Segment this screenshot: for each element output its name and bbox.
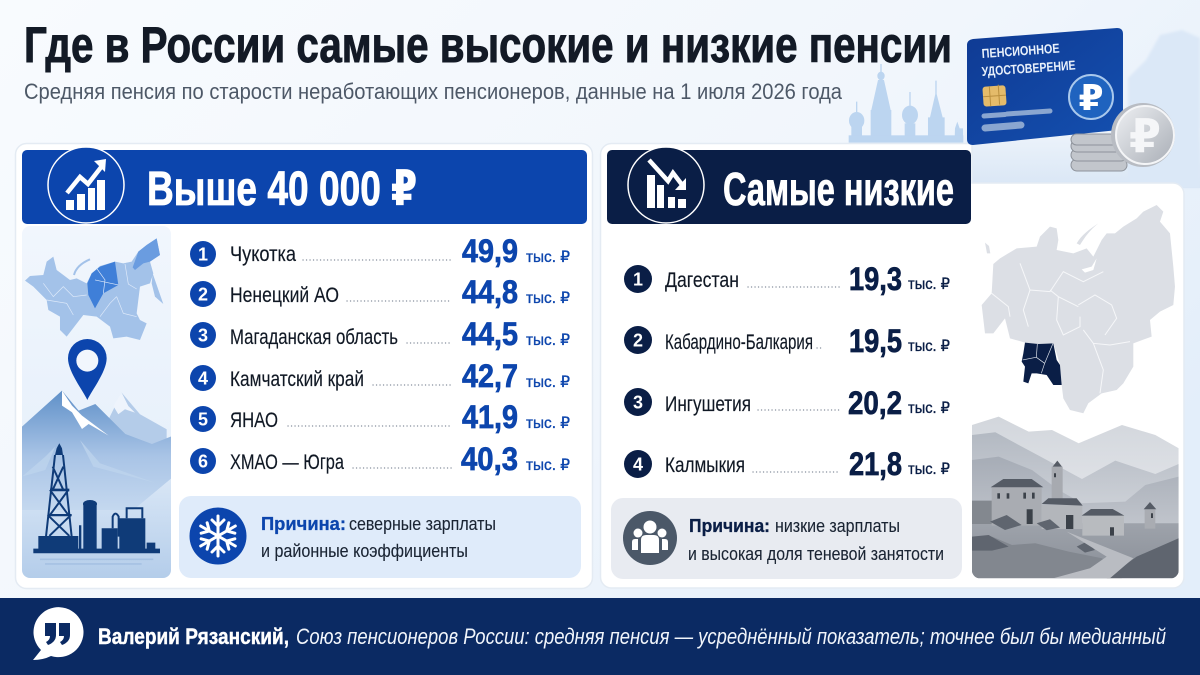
row: Magadan: 3 xyxy=(198,326,208,346)
row: Dagestan xyxy=(624,261,950,297)
pension card: УДОСТОВЕРЕНИЕ xyxy=(981,57,1076,79)
heading bar: above 40 000 xyxy=(22,150,587,224)
row: Nenets: тыс. ₽ xyxy=(526,290,570,307)
row: Kalmykia xyxy=(624,446,950,482)
row: Ingushetia: 20,2 xyxy=(848,385,902,421)
row: Yamal: тыс. ₽ xyxy=(526,415,570,432)
callout: northern reason: Причина: xyxy=(261,513,346,534)
row: Dagestan: тыс. ₽ xyxy=(908,276,950,293)
heading bar: lowest xyxy=(607,150,971,224)
row: Nenets: 2 xyxy=(198,284,208,304)
row: Ingushetia xyxy=(624,385,950,421)
large coin: ₽ xyxy=(1129,110,1161,162)
row: Chukotka: тыс. ₽ xyxy=(526,249,570,266)
row: Kabardino-Balkaria: Кабардино-Балкария xyxy=(665,331,813,354)
ranking list: low pensions xyxy=(624,261,950,482)
row: Dagestan: 19,3 xyxy=(849,261,902,297)
callout: low pay reason: Причина: xyxy=(689,515,770,536)
row: Kabardino-Balkaria: 19,5 xyxy=(849,323,902,359)
row: Khanty-Mansi: 40,3 xyxy=(461,441,518,477)
heading bar: above 40 000: Выше 40 000 ₽ xyxy=(147,163,417,216)
callout: low pay reason: и высокая доля теневой занятости xyxy=(688,543,944,564)
icon: location pin xyxy=(68,339,107,400)
row: Nenets: 44,8 xyxy=(462,274,518,310)
panel: low pensions xyxy=(600,144,1184,588)
row: Ingushetia: 3 xyxy=(633,392,643,412)
oil rig and plant xyxy=(33,443,160,564)
row: Kamchatka: 42,7 xyxy=(462,358,518,394)
callout: northern reason: северные зарплаты xyxy=(349,513,496,534)
row: Magadan: 44,5 xyxy=(462,316,518,352)
row: Kamchatka: 4 xyxy=(198,368,208,388)
large coin xyxy=(1111,103,1175,167)
row: Chukotka: Чукотка xyxy=(230,243,296,266)
row: Kamchatka: Камчатский край xyxy=(230,368,364,391)
coin stack xyxy=(1071,134,1127,171)
row: Kabardino-Balkaria: 2 xyxy=(633,330,643,350)
mountains xyxy=(22,391,173,510)
heading bar: lowest: Самые низкие xyxy=(723,163,954,215)
row: Kabardino-Balkaria: тыс. ₽ xyxy=(908,338,950,355)
row: Yamal xyxy=(190,399,570,435)
row: Khanty-Mansi: 6 xyxy=(198,452,208,472)
map with southern regions highlighted xyxy=(982,205,1175,413)
row: Kabardino-Balkaria xyxy=(624,323,950,359)
row: Kalmykia: тыс. ₽ xyxy=(908,461,950,478)
subtitle: Средняя пенсия по старости неработающих пенсионеров, данные на 1 июля 2026 года xyxy=(24,79,842,104)
callout: northern reason xyxy=(179,496,581,578)
row: Yamal: ЯНАО xyxy=(230,409,278,432)
row: Chukotka: 1 xyxy=(198,244,208,264)
pension card: ПЕНСИОННОЕ xyxy=(981,41,1060,61)
callout: northern reason: и районные коэффициенты xyxy=(261,540,468,561)
background illustration: pale map and cathedral xyxy=(849,30,1200,188)
row: Magadan xyxy=(190,316,570,352)
row: Ingushetia: тыс. ₽ xyxy=(908,400,950,417)
icon: snowflake xyxy=(190,508,246,564)
map of Russia with northern regions highlighted xyxy=(25,238,163,340)
illustration: pension card and coins xyxy=(967,28,1175,171)
row: Kalmykia: 4 xyxy=(633,454,643,474)
row: Nenets xyxy=(190,274,570,310)
village landscape xyxy=(972,417,1179,582)
icon: quote bubble xyxy=(33,607,84,660)
row: Magadan: Магаданская область xyxy=(230,326,398,349)
row: Kamchatka xyxy=(190,358,570,394)
callout: low pay reason xyxy=(611,498,962,579)
illustration: map and village xyxy=(972,205,1179,582)
row: Chukotka xyxy=(190,233,570,269)
row: Dagestan: 1 xyxy=(633,270,643,290)
title: Где в России самые высокие и низкие пенсии xyxy=(24,17,952,73)
row: Kalmykia: 21,8 xyxy=(849,446,902,482)
buildings xyxy=(972,461,1156,536)
row: Yamal: 5 xyxy=(198,410,208,430)
row: Ingushetia: Ингушетия xyxy=(665,393,751,416)
icon: rising chart xyxy=(48,147,124,223)
quote text: Валерий Рязанский, xyxy=(98,624,289,649)
row: Nenets: Ненецкий АО xyxy=(230,284,339,307)
callout: low pay reason: низкие зарплаты xyxy=(775,515,900,536)
ranking list: high pensions xyxy=(190,233,570,477)
quote banner xyxy=(0,598,1200,675)
icon: people xyxy=(623,511,677,565)
row: Kalmykia: Калмыкия xyxy=(665,454,745,477)
pension card xyxy=(967,28,1123,145)
illustration: map, pin, mountains, oil rig xyxy=(22,226,173,578)
row: Khanty-Mansi: ХМАО — Югра xyxy=(230,451,344,474)
row: Kamchatka: тыс. ₽ xyxy=(526,374,570,391)
row: Dagestan: Дагестан xyxy=(665,269,739,292)
row: Yamal: 41,9 xyxy=(462,399,518,435)
icon: falling chart xyxy=(628,147,704,223)
row: Khanty-Mansi: тыс. ₽ xyxy=(526,457,570,474)
row: Khanty-Mansi xyxy=(190,441,570,477)
row: Chukotka: 49,9 xyxy=(462,233,518,269)
pension card: ₽ xyxy=(1078,77,1104,118)
row: Magadan: тыс. ₽ xyxy=(526,332,570,349)
